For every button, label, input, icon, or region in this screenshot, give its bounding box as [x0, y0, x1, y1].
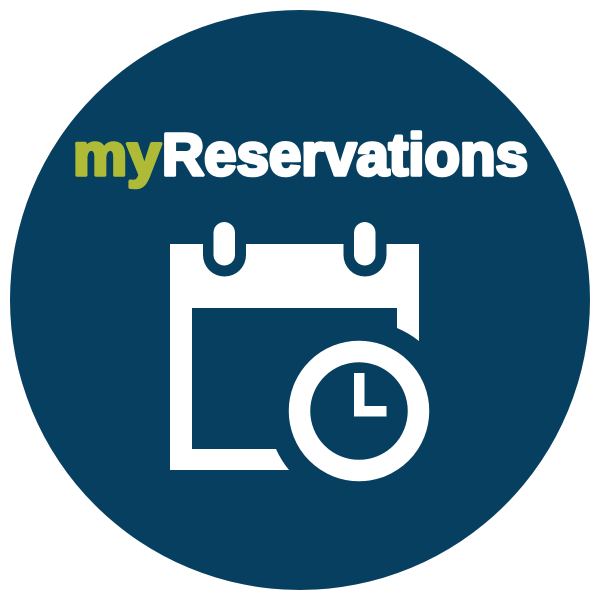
clock hands: [354, 373, 386, 416]
calendar ring right: [354, 222, 376, 266]
calendar body: [170, 244, 419, 470]
title: myReservations: my: [73, 122, 161, 188]
clock face: [300, 352, 418, 470]
calendar ring left: [214, 222, 235, 266]
title: myReservations: Reservations: [162, 122, 528, 188]
icon: calendar with clock: [170, 222, 419, 470]
